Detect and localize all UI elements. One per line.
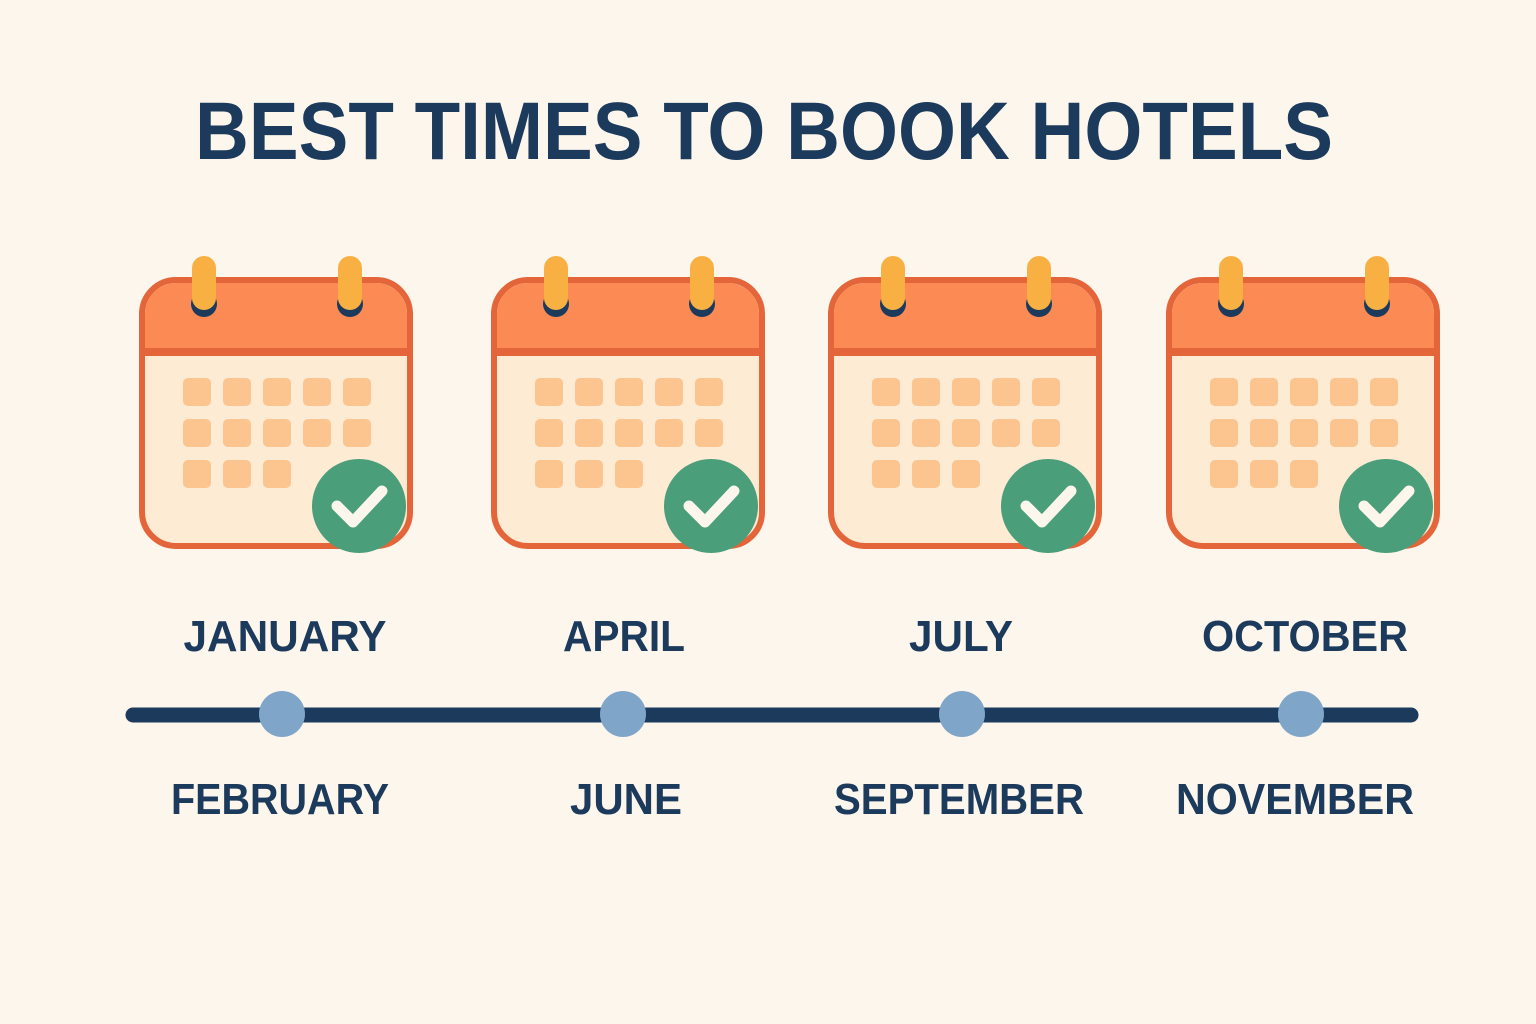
calendar icon: October: [1169, 256, 1437, 553]
bottom month labels: NOVEMBER: [1176, 775, 1414, 824]
top month labels: APRIL: [563, 612, 685, 661]
calendar icon: July: [831, 256, 1099, 553]
bottom month labels: SEPTEMBER: [834, 775, 1084, 824]
top month labels: OCTOBER: [1202, 612, 1408, 661]
bottom month labels: [171, 775, 1414, 824]
bottom month labels: FEBRUARY: [171, 775, 389, 824]
top month labels: [184, 612, 1408, 661]
timeline: [133, 691, 1411, 737]
top month labels: JANUARY: [184, 612, 386, 661]
top month labels: JULY: [909, 612, 1013, 661]
title: BEST TIMES TO BOOK HOTELS: [195, 86, 1333, 177]
calendar icon: January: [142, 256, 410, 553]
calendar icon: April: [494, 256, 762, 553]
bottom month labels: JUNE: [570, 775, 682, 824]
